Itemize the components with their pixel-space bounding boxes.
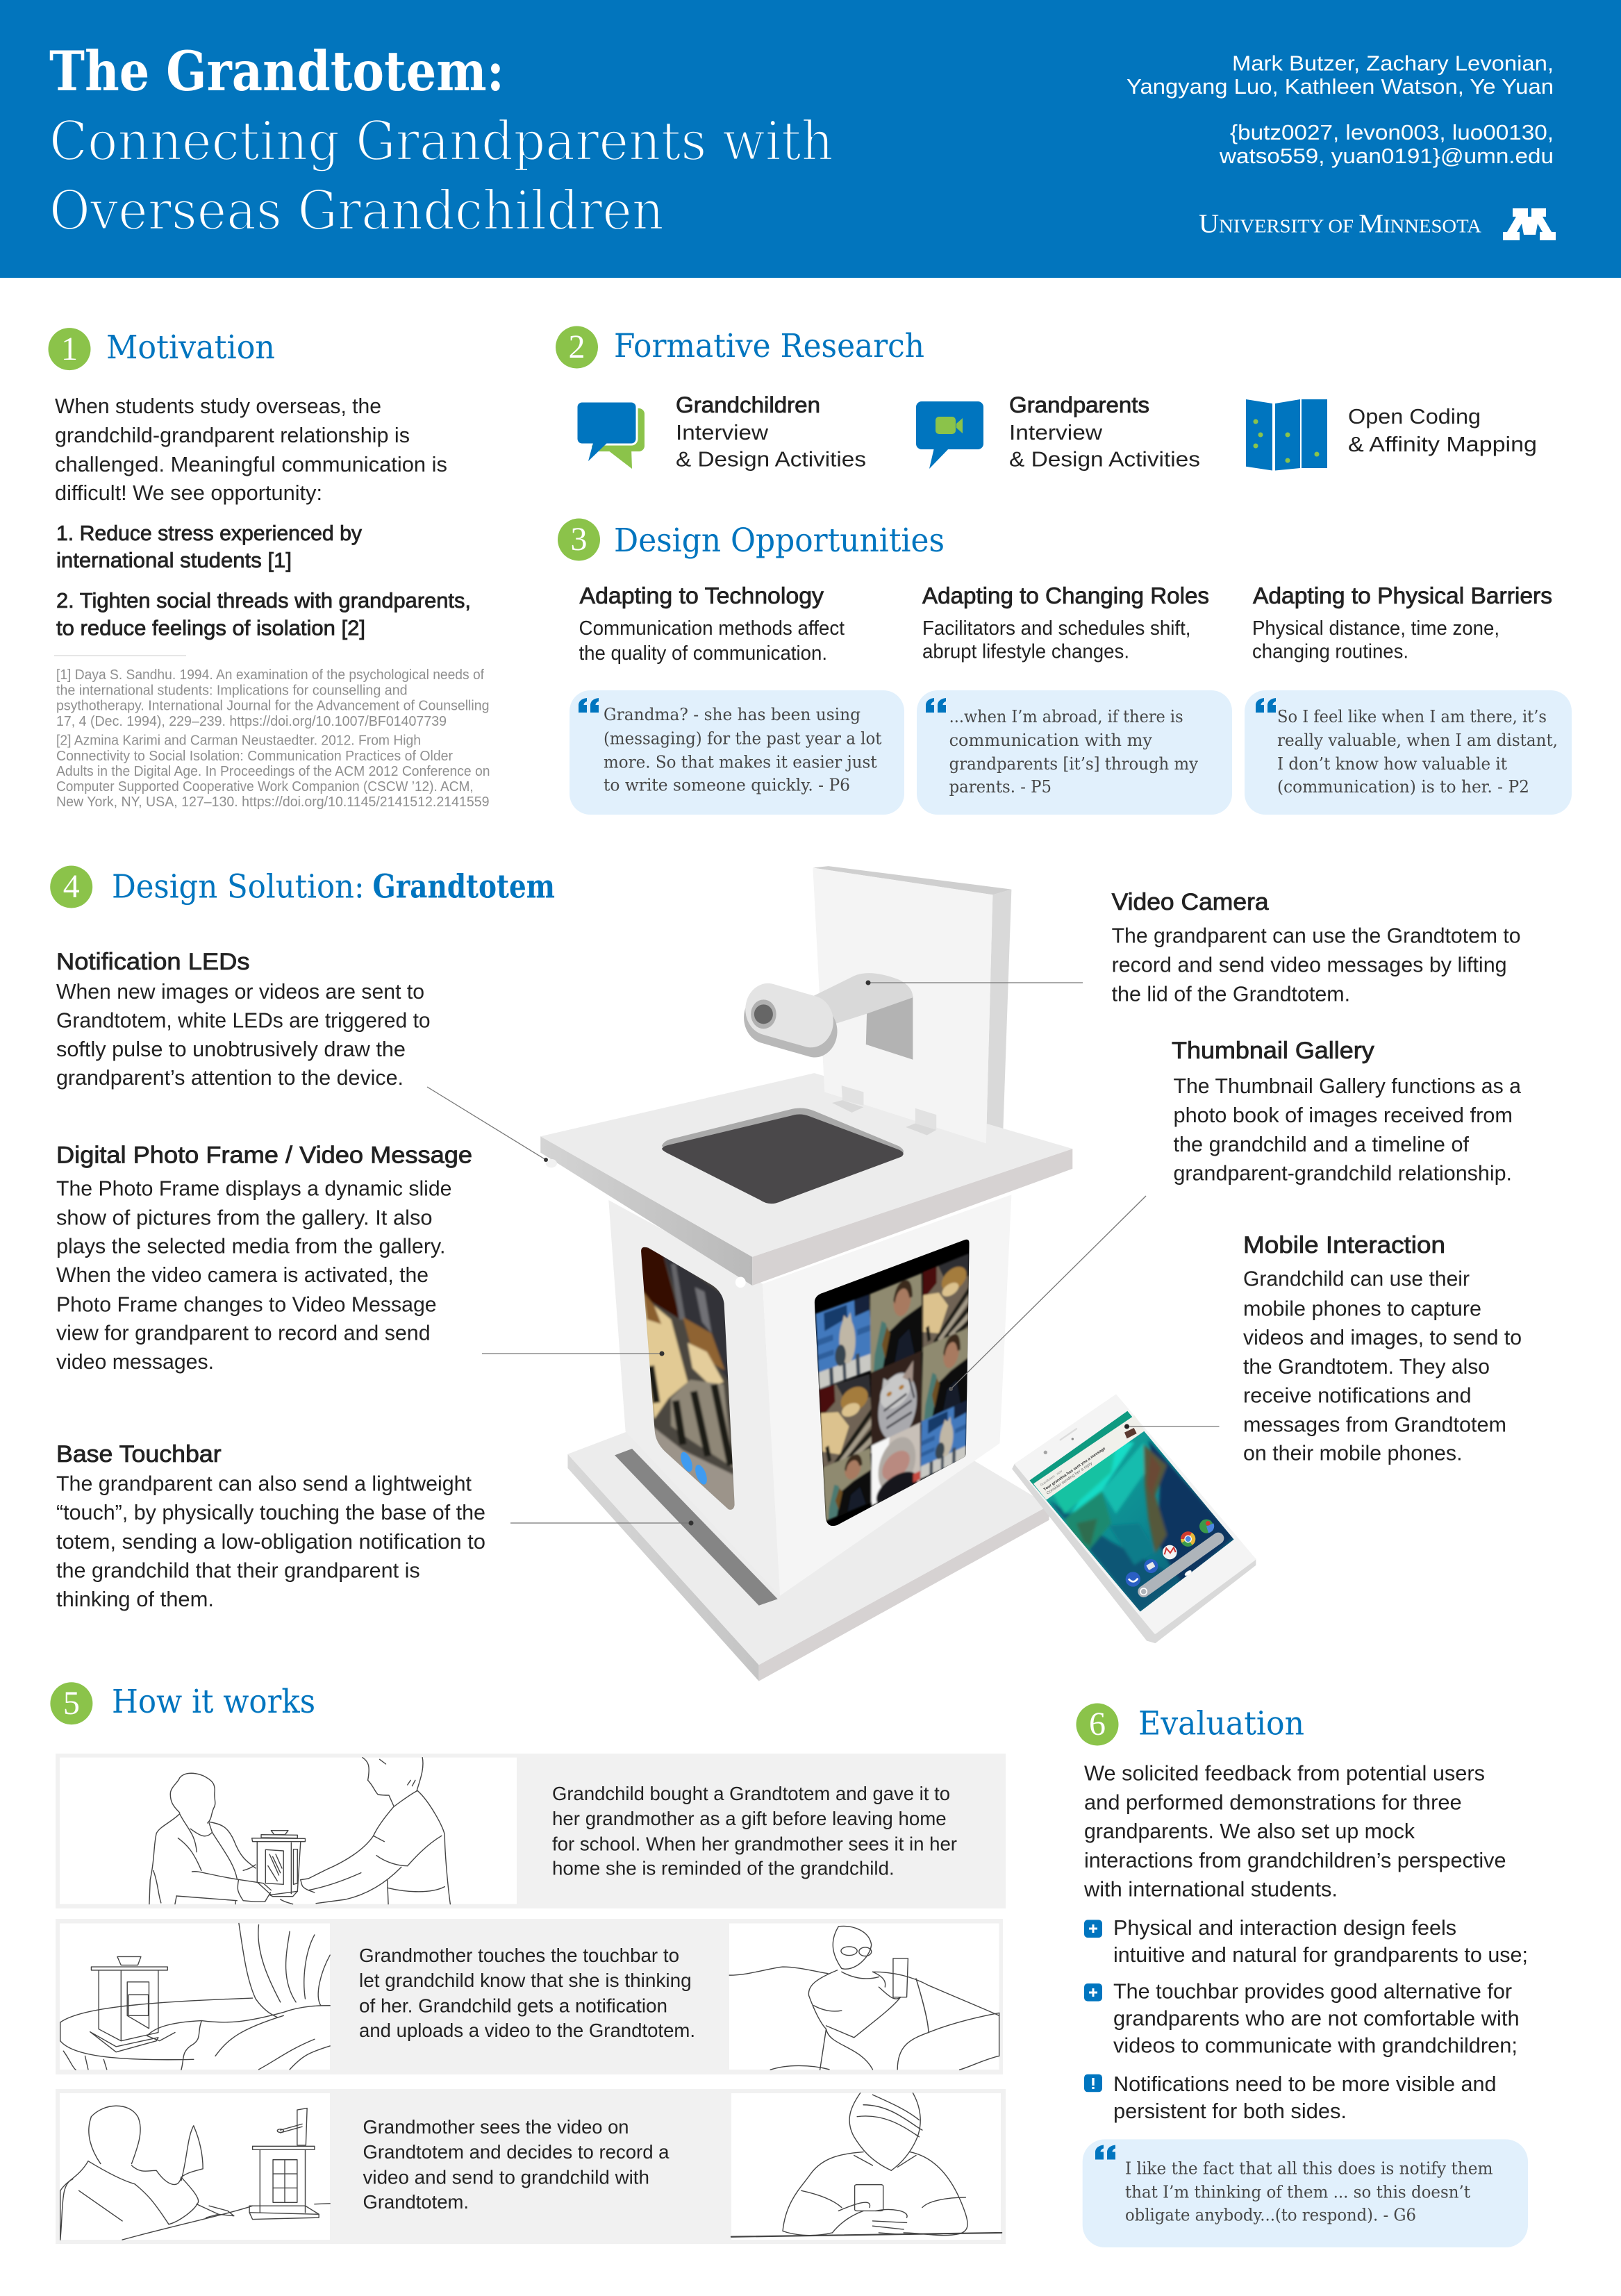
feature: mobile interaction: on their mobile phones. (1243, 1440, 1463, 1465)
opportunity: roles: abrupt lifestyle changes. (922, 640, 1129, 663)
references: Computer Supported Cooperative Work Companion (CSCW ’12). ACM, (56, 779, 474, 795)
feature: thumbnail gallery: grandparent-grandchild relationship. (1174, 1161, 1512, 1185)
research item: grandparents: Interview (1009, 420, 1103, 444)
research item: grandparents: Grandparents (1009, 392, 1149, 417)
quote: P5: parents. - P5 (949, 777, 1051, 797)
phone body (1013, 1396, 1255, 1642)
motivation text: challenged. Meaningful communication is (55, 452, 447, 476)
mobile phone (1013, 1396, 1255, 1642)
heading: design opportunities: Design Opportunities (614, 522, 945, 560)
step 2 text: of her. Grandchild gets a notification (359, 1995, 667, 2017)
quote: G6: obligate anybody...(to respond). - G6 (1125, 2206, 1416, 2225)
thumbnail gallery screen (810, 1236, 974, 1530)
motivation text (55, 394, 447, 505)
opportunity list (56, 521, 471, 640)
finding 1: intuitive and natural for grandparents to use; (1113, 1943, 1528, 1967)
references: 17, 4 (Dec. 1994), 229–239. https://doi.org/10.1007/BF01407739 (56, 714, 447, 729)
opportunity list: to reduce feelings of isolation [2] (56, 615, 365, 640)
quote: P6: more. So that makes it easier just (604, 753, 877, 772)
title (49, 39, 833, 242)
references: [1] Daya S. Sandhu. 1994. An examination of the psychological needs of (56, 667, 484, 683)
university wordmark: UNIVERSITY OF MINNESOTA (1199, 209, 1482, 238)
feature: digital photo frame: plays the selected media from the gallery. (56, 1233, 446, 1258)
lid screen (662, 1108, 904, 1204)
feature: notification LEDs (56, 949, 431, 1090)
step 3 text: Grandtotem and decides to record a (363, 2141, 670, 2163)
step 1 text: Grandchild bought a Grandtotem and gave it to (552, 1783, 950, 1804)
research item: open coding: Open Coding (1348, 404, 1481, 429)
phone notification (1034, 1416, 1144, 1499)
references: the international students: Implications for counselling and (56, 683, 408, 699)
finding 3 (1084, 2072, 1497, 2123)
number badge 5 (50, 1682, 92, 1724)
quote: G6 (1083, 2139, 1528, 2247)
title: Overseas Grandchildren (49, 180, 664, 242)
finding 1: Physical and interaction design feels (1113, 1915, 1456, 1940)
leader: touchbar (510, 1521, 693, 1525)
heading: how it works: How it works (112, 1683, 315, 1721)
illustration: grandtotem device (540, 866, 1072, 1681)
research item: grandchildren: & Design Activities (676, 447, 866, 472)
heading: design solution: Grandtotem (372, 868, 555, 906)
step 3 text: video and send to grandchild with (363, 2167, 649, 2188)
title: Connecting Grandparents with (49, 110, 833, 173)
finding 2 (1084, 1979, 1520, 2058)
research item: grandchildren: Interview (676, 420, 769, 444)
feature: base touchbar: “touch”, by physically touching the base of the (56, 1500, 485, 1524)
references: [2] Azmina Karimi and Carman Neustaedter. 2012. From High (56, 733, 421, 749)
number badge 4: 4 (63, 868, 80, 905)
finding 2: The touchbar provides good alternative for (1113, 1979, 1512, 2003)
heading: formative research: Formative Research (614, 327, 924, 365)
step 3 text (363, 2116, 670, 2213)
evaluation text: interactions from grandchildren’s perspective (1084, 1848, 1506, 1872)
step 3 (56, 2089, 1006, 2244)
leader: mobile (1124, 1424, 1220, 1429)
feature: digital photo frame: video messages. (56, 1349, 214, 1374)
quote: P6: (messaging) for the past year a lot (604, 729, 882, 749)
leader: video camera (865, 981, 1083, 985)
phone notification: Your grandma has sent you a message (1043, 1447, 1106, 1492)
number badge 5: 5 (63, 1685, 80, 1722)
sketch: grandchild on the sofa (729, 1926, 999, 2070)
opportunity: technology: the quality of communication. (579, 642, 827, 665)
heading: design solution: Design Solution: (112, 868, 365, 906)
number badge 4 (50, 865, 92, 908)
photo frame screen (641, 1247, 735, 1510)
quote: P5: grandparents [it’s] through my (949, 754, 1198, 774)
number badge 1 (49, 328, 90, 370)
feature: thumbnail gallery (1172, 1038, 1522, 1185)
feature: thumbnail gallery: The Thumbnail Gallery functions as a (1174, 1074, 1522, 1098)
evaluation text: We solicited feedback from potential users (1084, 1761, 1485, 1786)
section 4: design solution heading (50, 865, 555, 908)
number badge 6 (1076, 1703, 1118, 1746)
feature: digital photo frame: view for grandparent to record and send (56, 1321, 431, 1345)
authors: watso559, yuan0191}@umn.edu (1219, 144, 1554, 168)
leader: notification LEDs (427, 1087, 548, 1162)
quote: G6: I like the fact that all this does is notify them (1125, 2159, 1493, 2179)
opportunity: roles (922, 583, 1209, 663)
opportunity: barriers: Adapting to Physical Barriers (1253, 583, 1552, 608)
LEDs (546, 1159, 746, 1288)
step 1 text: her grandmother as a gift before leaving home (552, 1808, 947, 1829)
references: psythotherapy. International Journal for the Advancement of Counselling (56, 699, 489, 714)
references (56, 667, 490, 810)
number badge 2 (556, 326, 598, 368)
step 1 text: home she is reminded of the grandchild. (552, 1858, 895, 1879)
number badge 1: 1 (61, 331, 78, 367)
section 6: evaluation (1076, 1703, 1528, 2247)
phone app icons (1126, 1520, 1214, 1587)
feature: video camera: The grandparent can use the Grandtotem to (1112, 924, 1521, 947)
feature: base touchbar: The grandparent can also send a lightweight (56, 1471, 472, 1496)
evaluation text: and performed demonstrations for three (1084, 1790, 1462, 1814)
research item: grandchildren: Grandchildren (676, 392, 820, 417)
opportunity: barriers (1252, 583, 1552, 663)
opportunity: technology: Communication methods affect (579, 617, 845, 640)
feature: video camera: the lid of the Grandtotem. (1112, 982, 1350, 1006)
feature: notification LEDs: When new images or videos are sent to (56, 979, 424, 1004)
feature: mobile interaction: the Grandtotem. They also (1243, 1354, 1490, 1379)
feature: mobile interaction: mobile phones to capture (1243, 1296, 1481, 1320)
section 1: motivation (49, 328, 490, 810)
heading: motivation: Motivation (106, 328, 275, 367)
feature: digital photo frame: The Photo Frame displays a dynamic slide (56, 1176, 451, 1200)
callout lines (427, 981, 1220, 1525)
header banner (0, 0, 1621, 278)
feature: mobile interaction: videos and images, to send to (1243, 1325, 1522, 1349)
feature: video camera: Video Camera (1112, 889, 1269, 915)
quote: P2: (communication) is to her. - P2 (1277, 777, 1529, 797)
finding 2: videos to communicate with grandchildren; (1113, 2033, 1518, 2058)
opportunity list: 2. Tighten social threads with grandparents, (56, 588, 471, 613)
feature: digital photo frame: Digital Photo Frame / Video Message (56, 1142, 472, 1168)
quote: P5: ...when I’m abroad, if there is (949, 707, 1183, 726)
research item: grandparents (1009, 392, 1200, 472)
opportunity: roles: Adapting to Changing Roles (922, 583, 1209, 608)
feature: notification LEDs: grandparent’s attention to the device. (56, 1065, 404, 1090)
section 2: formative research (556, 326, 1537, 472)
finding 2: grandparents who are not comfortable with (1113, 2006, 1520, 2031)
feature: mobile interaction (1243, 1232, 1522, 1465)
leader: photo frame (482, 1351, 664, 1356)
feature: thumbnail gallery: Thumbnail Gallery (1172, 1038, 1374, 1064)
feature: digital photo frame: show of pictures from the gallery. It also (56, 1206, 433, 1229)
base plate (567, 1363, 1049, 1681)
research item: grandchildren (676, 392, 866, 472)
step 2 text (359, 1945, 695, 2041)
motivation text: grandchild-grandparent relationship is (55, 423, 410, 447)
opportunity: technology (579, 583, 845, 665)
totem body (608, 1195, 1011, 1596)
feature: mobile interaction: messages from Grandtotem (1243, 1413, 1506, 1436)
phone wallpaper (1029, 1411, 1234, 1612)
authors (1127, 51, 1554, 168)
quote: P2: So I feel like when I am there, it’s (1277, 707, 1547, 726)
step 3 text: Grandtotem. (363, 2191, 469, 2213)
research item: grandparents: & Design Activities (1009, 447, 1200, 472)
feature: notification LEDs: softly pulse to unobtrusively draw the (56, 1037, 406, 1061)
touchbar (615, 1449, 778, 1606)
feature: notification LEDs: Notification LEDs (56, 949, 250, 975)
quote: P2 (1245, 690, 1572, 815)
evaluation text: grandparents. We also set up mock (1084, 1819, 1415, 1843)
step 1 text (552, 1783, 957, 1879)
references: Connectivity to Social Isolation: Communication Practices of Older (56, 749, 453, 764)
section 5: how it works (50, 1682, 1006, 2244)
feature: base touchbar: thinking of them. (56, 1587, 214, 1611)
finding 1 (1084, 1915, 1528, 1967)
feature: digital photo frame: When the video camera is activated, the (56, 1263, 429, 1287)
quote: P2: I don’t know how valuable it (1277, 754, 1507, 774)
authors: {butz0027, levon003, luo00130, (1230, 120, 1554, 144)
research item: open coding (1348, 404, 1537, 456)
step 2 text: Grandmother touches the touchbar to (359, 1945, 679, 1966)
opportunity: roles: Facilitators and schedules shift, (922, 617, 1190, 640)
number badge 3 (558, 518, 600, 561)
opportunity: technology: Adapting to Technology (579, 583, 824, 608)
quote: G6: that I’m thinking of them ... so this doesn’t (1125, 2182, 1470, 2202)
feature: base touchbar (56, 1441, 485, 1611)
section 3: design opportunities (558, 518, 1572, 815)
step 2 text: and uploads a video to the Grandtotem. (359, 2020, 695, 2041)
phone notification: Consider sending her a reply (1046, 1461, 1093, 1496)
authors: Yangyang Luo, Kathleen Watson, Ye Yuan (1127, 74, 1554, 99)
finding 3: persistent for both sides. (1113, 2099, 1347, 2123)
feature: thumbnail gallery: the grandchild and a timeline of (1174, 1132, 1469, 1156)
step 2 text: let grandchild know that she is thinking (359, 1970, 692, 1991)
opportunity: barriers: Physical distance, time zone, (1252, 617, 1499, 640)
feature: video camera (1112, 889, 1521, 1006)
heading: design solution (112, 868, 555, 906)
research item: open coding: & Affinity Mapping (1348, 432, 1537, 456)
number badge 3: 3 (571, 521, 588, 558)
feature: notification LEDs: Grandtotem, white LEDs are triggered to (56, 1008, 431, 1032)
hinges (832, 1085, 936, 1135)
quote: P2: really valuable, when I am distant, (1277, 731, 1558, 750)
evaluation text: with international students. (1083, 1877, 1338, 1902)
opportunity list: international students [1] (56, 548, 292, 572)
phone search bar (1140, 1538, 1218, 1595)
feature: base touchbar: the grandchild that their grandparent is (56, 1558, 420, 1582)
sketch: grandchild watching on phone (731, 2093, 1001, 2237)
feature: digital photo frame (56, 1142, 472, 1374)
authors: Mark Butzer, Zachary Levonian, (1232, 51, 1554, 76)
step 3 text: Grandmother sees the video on (363, 2116, 629, 2138)
quote: P5 (917, 690, 1232, 815)
heading: evaluation: Evaluation (1138, 1705, 1304, 1743)
leader: thumbnail gallery (949, 1196, 1146, 1391)
step 2 (56, 1919, 1003, 2074)
sketch: handing over the totem (149, 1758, 450, 1904)
sketch: grandmother touching touchbar (60, 1923, 330, 2070)
icon: video bubble (916, 401, 983, 469)
references: New York, NY, USA, 127–130. https://doi.org/10.1145/2141512.2141559 (56, 795, 489, 810)
title: The Grandtotem: (49, 39, 504, 103)
feature: base touchbar: totem, sending a low-obligation notification to (56, 1529, 485, 1554)
number badge 2: 2 (568, 328, 585, 365)
quote: P6 (570, 690, 904, 815)
icon: affinity map (1246, 399, 1327, 471)
feature: mobile interaction: Mobile Interaction (1243, 1232, 1445, 1258)
step 1 text: for school. When her grandmother sees it in her (552, 1833, 957, 1854)
phone speaker and camera (1044, 1429, 1076, 1454)
motivation text: difficult! We see opportunity: (55, 481, 322, 505)
camera (739, 978, 842, 1063)
feature: digital photo frame: Photo Frame changes to Video Message (56, 1292, 437, 1316)
icon: chat bubbles (576, 401, 645, 469)
motivation text: When students study overseas, the (55, 394, 381, 418)
upright lid panel (813, 866, 1011, 1143)
finding 3: Notifications need to be more visible and (1113, 2072, 1497, 2096)
lid top (540, 1073, 1072, 1286)
quote: P5: communication with my (949, 731, 1152, 750)
opportunity list: 1. Reduce stress experienced by (56, 521, 362, 545)
feature: mobile interaction: receive notifications and (1243, 1383, 1471, 1407)
feature: mobile interaction: Grandchild can use their (1243, 1267, 1470, 1290)
step 1 (56, 1754, 1006, 1908)
opportunity: barriers: changing routines. (1252, 640, 1408, 663)
sketch: grandmother recording a video (60, 2106, 330, 2240)
evaluation text (1083, 1761, 1506, 1902)
references: Adults in the Digital Age. In Proceedings of the ACM 2012 Conference on (56, 764, 490, 779)
phone notification: Grandtotem · now (1040, 1469, 1063, 1487)
feature: base touchbar: Base Touchbar (56, 1441, 222, 1467)
feature: video camera: record and send video messages by lifting (1112, 953, 1507, 976)
quote: P6: to write someone quickly. - P6 (604, 775, 850, 795)
icon: university M logo (1503, 208, 1556, 240)
quote: P6: Grandma? - she has been using (604, 705, 861, 724)
number badge 6: 6 (1089, 1706, 1106, 1742)
feature: thumbnail gallery: photo book of images received from (1174, 1103, 1513, 1127)
camera arm (805, 973, 913, 1060)
